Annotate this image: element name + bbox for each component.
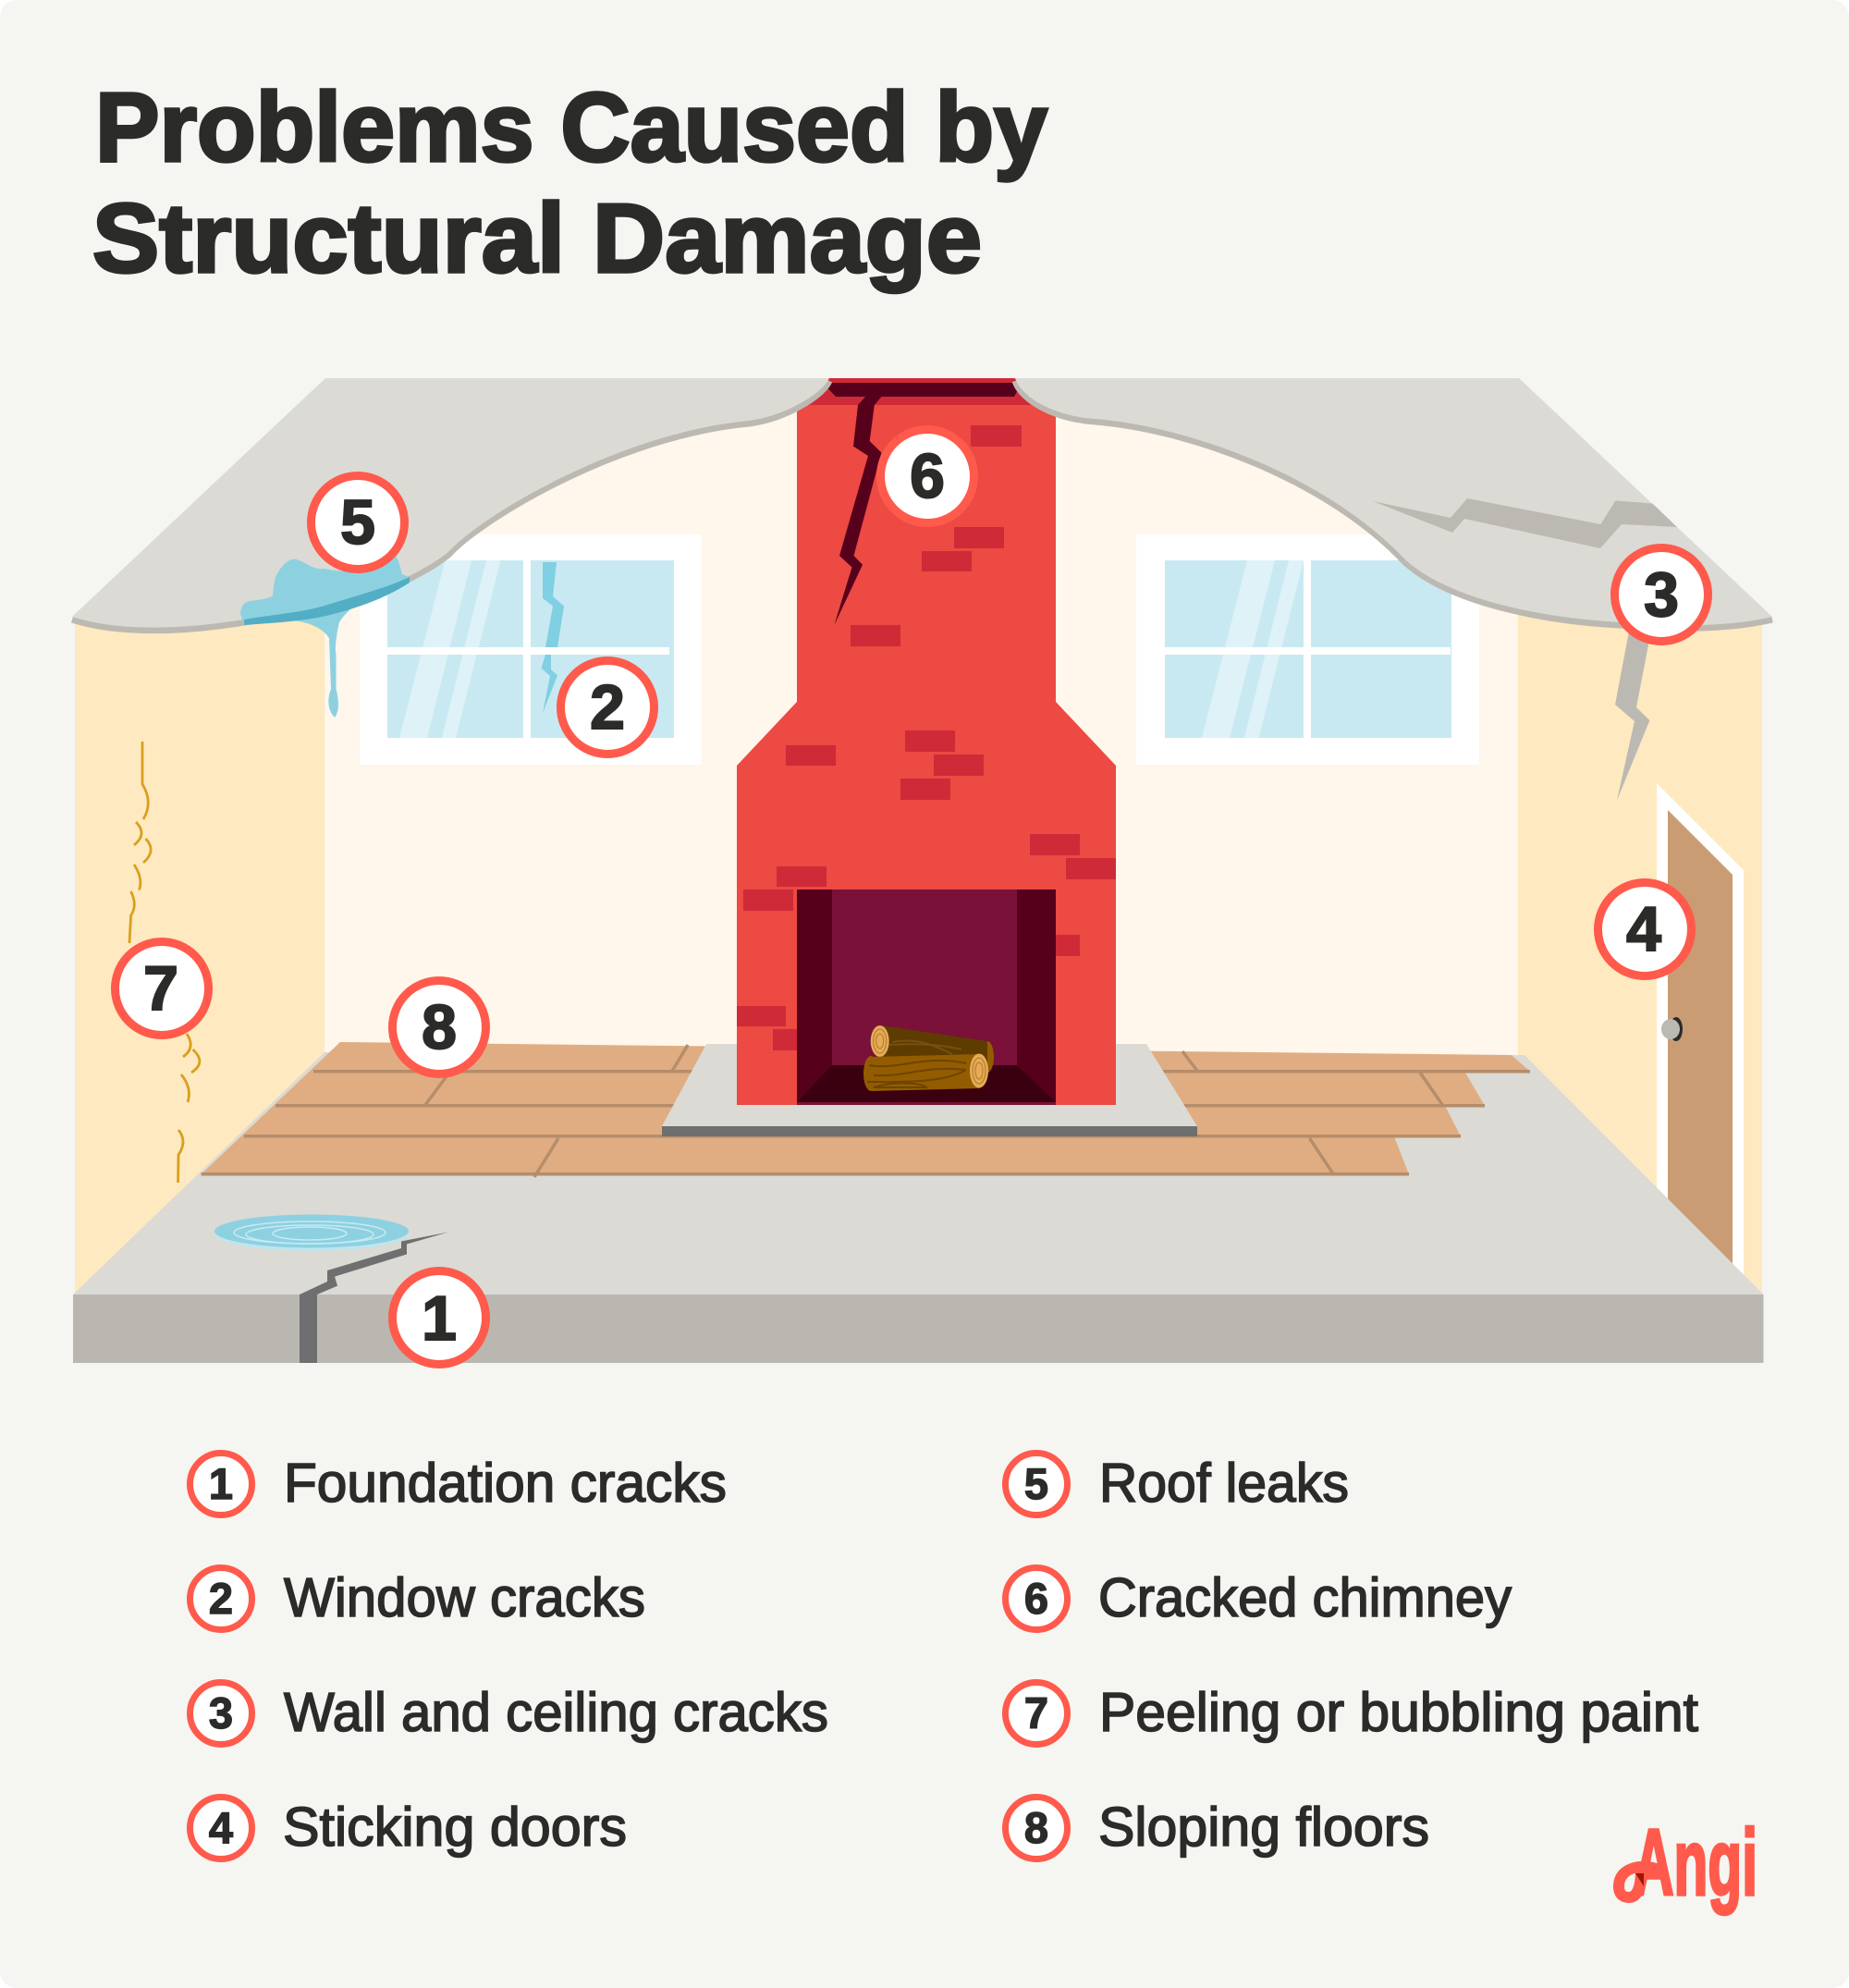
- title: Structural Damage: [92, 184, 982, 293]
- bricks: [737, 425, 1116, 1050]
- peeling paint marks: [129, 742, 200, 1183]
- marker 4: 4: [1626, 894, 1661, 964]
- marker 8: 8: [422, 992, 457, 1062]
- legend item 7: Peeling or bubbling paint: [1099, 1682, 1698, 1743]
- legend item 8: 8: [1024, 1803, 1048, 1852]
- marker 7: [115, 941, 209, 1036]
- legend item 2: Window cracks: [284, 1567, 645, 1628]
- left window: [360, 534, 702, 765]
- marker 6: [880, 429, 974, 523]
- right side wall: [1518, 592, 1762, 1304]
- ceiling right: [1015, 378, 1772, 625]
- legend item 3: 3: [209, 1688, 233, 1737]
- legend item 4: 4: [209, 1803, 233, 1852]
- left side wall: [75, 592, 324, 1304]
- floor slab: [73, 1052, 1764, 1363]
- back wall: [324, 407, 1519, 1063]
- chimney: [737, 378, 1116, 1105]
- legend item 7: 7: [1024, 1688, 1048, 1737]
- puddle: [214, 1215, 409, 1251]
- legend item 1: 1: [209, 1459, 233, 1508]
- legend left column: [190, 1453, 828, 1859]
- foundation crack: [300, 1232, 448, 1363]
- legend item 3: Wall and ceiling cracks: [284, 1682, 828, 1743]
- title: Problems Caused by: [95, 73, 1047, 182]
- hearth: [662, 1044, 1197, 1136]
- logs: [863, 1025, 994, 1091]
- legend item 6: Cracked chimney: [1098, 1567, 1512, 1628]
- chimney crack: [834, 397, 881, 625]
- marker 3: [1614, 547, 1708, 642]
- legend item 1: Foundation cracks: [284, 1453, 727, 1514]
- legend item 5: [1006, 1453, 1349, 1515]
- legend item 5: 5: [1024, 1459, 1048, 1508]
- marker 1: 1: [422, 1283, 457, 1354]
- legend item 5: Roof leaks: [1099, 1453, 1349, 1514]
- marker 2: [560, 660, 655, 755]
- legend item 4: Sticking doors: [283, 1797, 627, 1858]
- sagging ceiling shadow: [72, 381, 1772, 631]
- legend item 6: 6: [1024, 1574, 1048, 1623]
- wall crack: [1615, 632, 1649, 801]
- legend item 2: 2: [209, 1574, 233, 1623]
- marker 7: 7: [143, 953, 178, 1024]
- marker 8: [392, 980, 486, 1074]
- roof leak: [240, 555, 410, 718]
- marker 3: 3: [1644, 559, 1679, 630]
- Angi logo: [1619, 1811, 1757, 1915]
- ceiling crack: [1373, 498, 1677, 548]
- marker 1: [392, 1270, 486, 1365]
- fireplace opening: [797, 890, 1056, 1105]
- ceiling left: [72, 378, 829, 628]
- marker 4: [1598, 882, 1692, 976]
- right window: [1136, 534, 1479, 765]
- wood floor planks: [202, 1042, 1530, 1177]
- house illustration: [72, 378, 1772, 1365]
- marker 2: 2: [590, 672, 625, 742]
- legend right column: [1006, 1453, 1698, 1859]
- marker 5: 5: [340, 487, 375, 558]
- title: [92, 73, 1047, 293]
- legend item 8: Sloping floors: [1098, 1797, 1429, 1858]
- marker 6: 6: [910, 441, 945, 511]
- door: [1657, 783, 1744, 1295]
- marker 5: [311, 475, 405, 570]
- Angi logo: Angi: [1634, 1811, 1757, 1915]
